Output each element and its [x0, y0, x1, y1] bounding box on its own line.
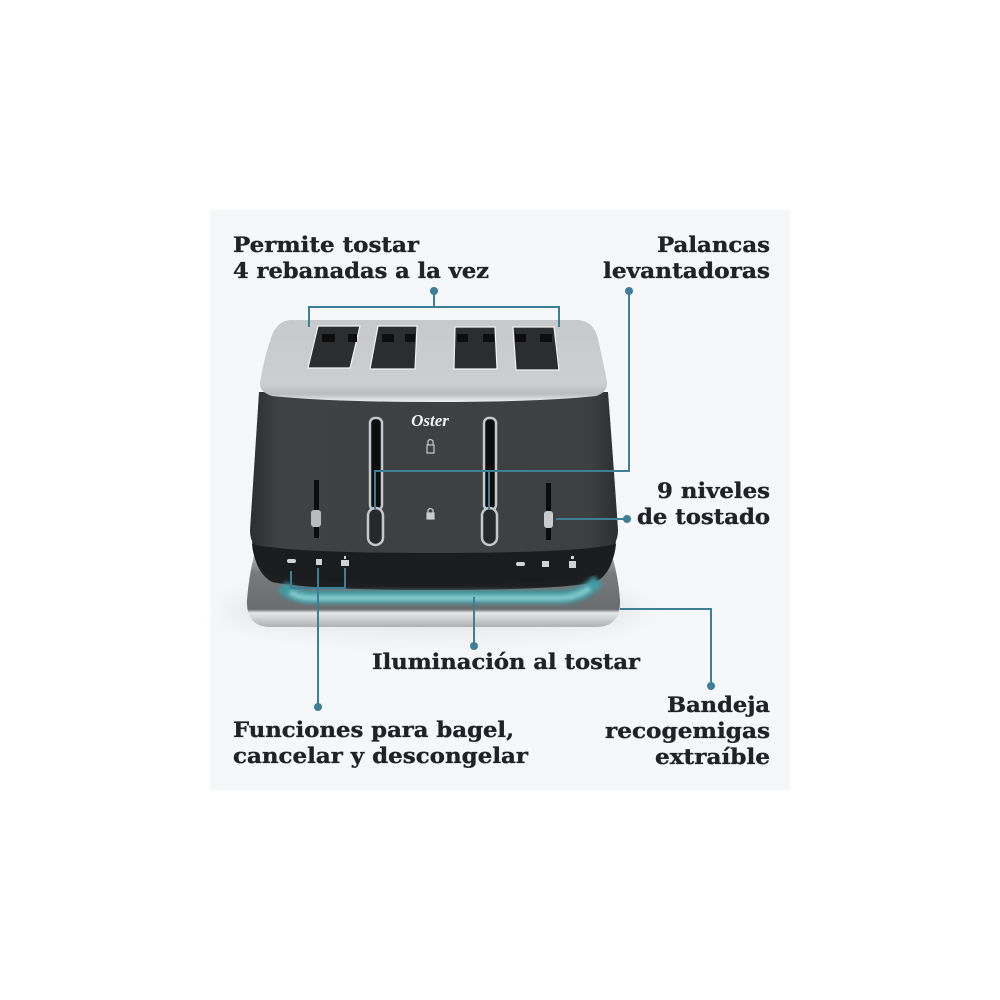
- brand logo: Oster: [411, 411, 449, 430]
- shadow: [224, 586, 644, 634]
- toaster body: [250, 392, 618, 556]
- crumb tray: [247, 556, 620, 627]
- left browning slider: [311, 480, 321, 538]
- callout: niveles de tostado: 9 niveles: [657, 478, 770, 503]
- callout: palancas: levantadoras: [603, 258, 770, 283]
- callout: cuatro rebanadas: 4 rebanadas a la vez: [233, 258, 489, 283]
- toast slots: [308, 326, 559, 370]
- callout: bandeja: [605, 609, 770, 769]
- callout: iluminación: Iluminación al tostar: [372, 649, 641, 674]
- callout: iluminación: [372, 597, 641, 674]
- lock icons: [427, 440, 434, 519]
- callout: bandeja: extraíble: [655, 744, 770, 769]
- callout: palancas: [375, 232, 770, 510]
- function buttons: [287, 556, 576, 568]
- left lever: [368, 418, 383, 545]
- callout: cuatro rebanadas: Permite tostar: [233, 232, 420, 257]
- callout: funciones: [233, 568, 529, 768]
- callout: bandeja: Bandeja: [667, 692, 770, 717]
- callout: funciones: Funciones para bagel,: [233, 717, 514, 742]
- silver top: [260, 320, 607, 402]
- toasting light: [282, 580, 598, 598]
- callout: bandeja: recogemigas: [605, 718, 770, 743]
- callout: niveles de tostado: de tostado: [637, 504, 770, 529]
- right browning slider: [544, 483, 553, 540]
- callout: niveles de tostado: [556, 478, 770, 529]
- slot inner details: [322, 334, 552, 342]
- panel: background: [210, 210, 790, 790]
- callout: cuatro rebanadas: [233, 232, 559, 327]
- callout: palancas: Palancas: [657, 232, 770, 257]
- control strip: [252, 544, 616, 584]
- right lever: [482, 418, 497, 545]
- callout: funciones: cancelar y descongelar: [233, 743, 529, 768]
- toaster illustration: [224, 320, 644, 634]
- toaster lower base: [252, 540, 616, 590]
